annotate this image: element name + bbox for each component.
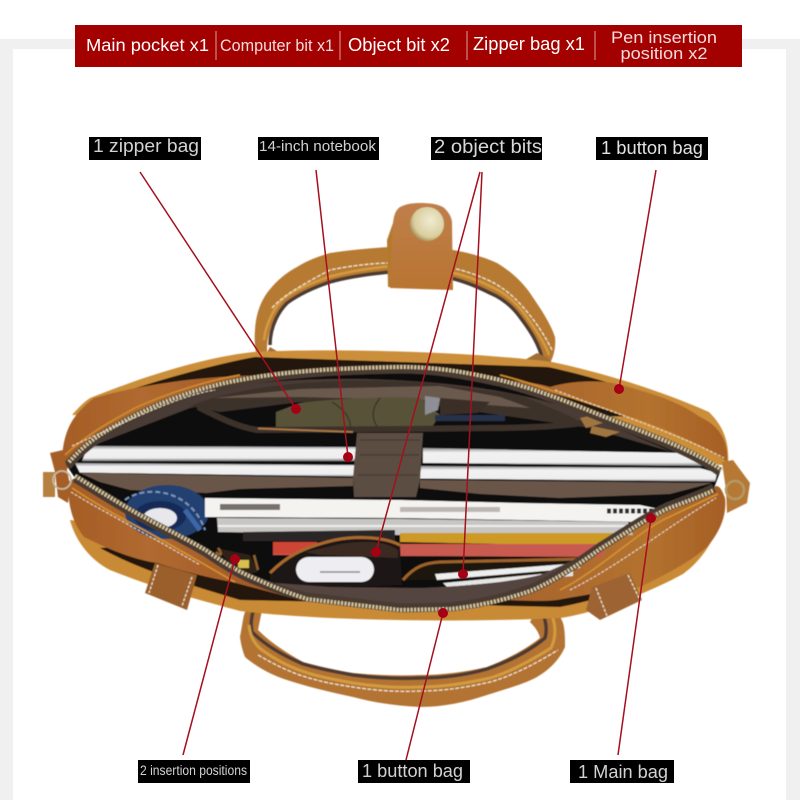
handle foot left bbox=[240, 347, 302, 378]
belt loop right bbox=[586, 573, 642, 620]
label: zipper bag: 1 zipper bag bbox=[93, 135, 199, 156]
charging cable bbox=[125, 485, 209, 539]
handle foot right bbox=[497, 353, 560, 383]
computer mouse bbox=[296, 557, 374, 582]
lower lining bbox=[212, 547, 600, 608]
laptop bbox=[75, 446, 717, 482]
pointer: object bit two bbox=[458, 172, 482, 579]
header item: computer bit: Computer bit x1 bbox=[220, 37, 334, 55]
front pockets bbox=[270, 538, 580, 590]
label: notebook: 14-inch notebook bbox=[259, 138, 376, 155]
pointer: main bag bbox=[618, 513, 656, 755]
back leather panel bbox=[62, 370, 727, 470]
label: button bag bottom: 1 button bag bbox=[362, 761, 463, 781]
canvas lining bbox=[80, 473, 712, 498]
zippers bbox=[65, 367, 726, 610]
pointer: button bag bottom bbox=[406, 608, 448, 760]
label: main bag: 1 Main bag bbox=[578, 762, 668, 782]
brass button bbox=[410, 207, 444, 241]
pointer: zipper bag bbox=[140, 172, 301, 414]
label: insertion positions: 2 insertion positions bbox=[140, 763, 247, 778]
cloth strap bbox=[353, 433, 423, 497]
back leather rim bbox=[72, 350, 728, 466]
label: button bag top: 1 button bag bbox=[601, 138, 703, 158]
header item: main pocket: Main pocket x1 bbox=[86, 35, 209, 55]
label: insertion positions bbox=[138, 760, 250, 783]
button tab bbox=[387, 203, 453, 290]
belt loop left bbox=[145, 563, 197, 610]
header item: object bit: Object bit x2 bbox=[348, 35, 450, 55]
side strap left bbox=[43, 450, 71, 503]
upper lining bbox=[82, 379, 672, 452]
header banner bbox=[75, 25, 742, 67]
pointer: button bag top bbox=[614, 170, 656, 394]
pointer: notebook bbox=[316, 170, 353, 462]
back handle bbox=[255, 247, 555, 363]
front leather rim bbox=[70, 515, 722, 620]
zipper pocket contents bbox=[276, 396, 505, 430]
pens bbox=[435, 563, 580, 580]
pointer: insertion positions bbox=[183, 554, 240, 755]
label: object bits: 2 object bits bbox=[434, 137, 542, 158]
insertion slot item bbox=[216, 548, 258, 575]
front leather panel bbox=[68, 478, 725, 607]
header item: pen insertion: Pen insertion bbox=[611, 28, 717, 47]
stack of books bbox=[205, 498, 664, 557]
front handle bbox=[240, 598, 565, 707]
inner pocket zip bbox=[198, 407, 583, 430]
pointer: object bit one bbox=[371, 172, 480, 557]
side strap right bbox=[722, 460, 750, 513]
zipper pull bbox=[580, 414, 620, 437]
header item: zipper bag: Zipper bag x1 bbox=[473, 34, 585, 54]
leather briefcase bbox=[43, 203, 750, 707]
eye interior bbox=[67, 369, 720, 608]
header item: position: position x2 bbox=[620, 44, 708, 63]
